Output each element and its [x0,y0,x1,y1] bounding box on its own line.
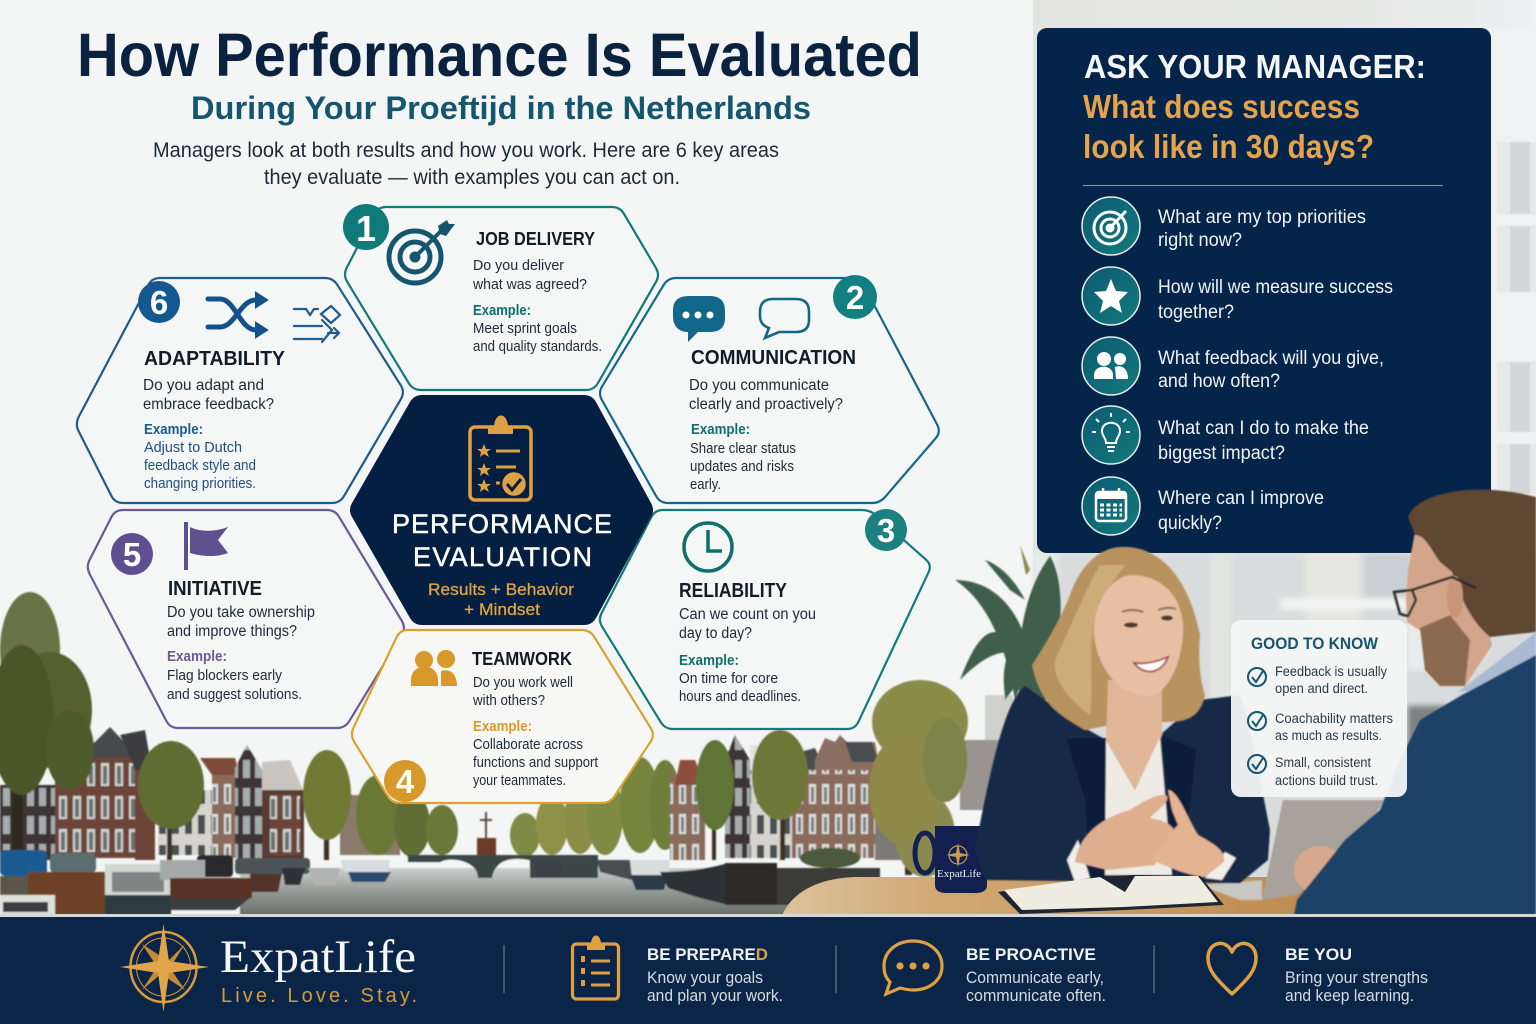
panel subheading [1083,88,1374,165]
icon: target [389,220,455,283]
text: adaptability [143,377,274,492]
text: communication: clearly and proactively? [689,396,843,413]
text: adaptability: Adjust to Dutch [144,440,242,456]
text: teamwork: Example: [473,718,532,735]
text: adaptability: embrace feedback? [143,396,274,413]
footer item: be proactive: Communicate early, [966,969,1104,987]
icon: clock [684,523,732,571]
photo: man seen from behind [1294,490,1536,915]
text: job delivery: Meet sprint goals [473,321,577,337]
text: job delivery: Do you deliver [473,258,564,274]
photo: laptop [1200,800,1385,900]
text: teamwork: Do you work well [473,675,573,691]
bridge [408,855,598,878]
text: adaptability: changing priorities. [144,476,256,492]
icon: change paths [294,306,340,342]
hair [1408,490,1536,637]
panel heading: GOOD TO KNOW [1251,635,1378,653]
number badge 4: 4 [396,763,415,800]
item 2 [1248,711,1393,743]
text: teamwork [472,675,598,789]
question 3: What feedback will you give, [1158,348,1384,369]
footer band [0,914,1536,1024]
cuffs [1067,840,1236,882]
text: reliability: day to day? [679,625,752,642]
center heading: PERFORMANCE [392,509,612,539]
hair highlight [1055,565,1125,715]
text: teamwork: functions and support [473,755,598,771]
icon: clipboard checklist [470,416,531,500]
number badge 5 [111,533,153,575]
center subtext: + Mindset [464,601,540,619]
footer item: be proactive: BE PROACTIVE [966,945,1096,964]
background: plant [955,545,1075,810]
icon: outlined speech bubble [760,299,809,338]
footer item: be proactive [884,941,1106,1005]
hexagon: center performance evaluation [350,395,653,625]
text: initiative: and improve things? [167,623,297,640]
hexagon 3: reliability [600,509,930,729]
number badge 1 [343,204,389,250]
face [1406,532,1492,686]
hexagon 2: communication [600,275,939,503]
number badge 1: 1 [356,208,376,249]
item 1 [1248,664,1387,696]
subtitle: During Your Proeftijd in the Netherlands [191,90,811,126]
intro text: they evaluate — with examples you can act on. [264,166,680,189]
question 2: How will we measure success [1158,277,1393,298]
text: communication: early. [690,477,721,493]
question 1: right now? [1158,230,1242,251]
icon: flag [184,522,228,570]
center subtext [428,581,575,619]
text: communication: Do you communicate [689,377,829,394]
text: initiative: Do you take ownership [167,604,315,621]
face [1094,575,1183,696]
photo: notebook [998,875,1224,914]
number badge 6 [138,281,180,323]
beard [1420,615,1470,686]
question 3 [1082,337,1384,395]
right buildings [670,735,915,860]
hexagon 6: adaptability [77,278,403,503]
panel subheading: What does success [1083,88,1360,125]
panel subheading: look like in 30 days? [1083,128,1374,165]
item 1: open and direct. [1275,681,1368,696]
heading: adaptability: ADAPTABILITY [144,348,286,370]
item 2: as much as results. [1275,728,1382,743]
text: communication: updates and risks [690,459,794,475]
question 1 [1082,197,1366,255]
text: communication [689,377,843,493]
text: reliability: Example: [679,652,739,669]
background: table [782,877,1310,916]
text: teamwork: your teammates. [473,773,566,789]
center subtext: Results + Behavior [428,581,575,599]
left buildings [0,727,400,860]
left trees [0,592,458,860]
text: job delivery [472,258,602,355]
blouse [1105,737,1172,875]
question 4 [1082,406,1369,464]
heading: teamwork: TEAMWORK [472,649,572,669]
left boats [0,860,391,916]
item 2: Coachability matters [1275,711,1393,726]
number badge 3: 3 [877,512,895,549]
neck and chest [1106,680,1162,790]
eyes and smile [1122,608,1176,672]
text: initiative: Example: [167,648,227,665]
number badge 2: 2 [846,279,864,316]
intro text [153,139,779,189]
heading: initiative: INITIATIVE [168,578,262,600]
logo wordmark: ExpatLife [220,931,416,983]
text: adaptability: feedback style and [144,458,256,474]
footer item: be prepared [572,936,783,1005]
text: communication: Share clear status [690,441,796,457]
heading: communication: COMMUNICATION [691,347,856,369]
center heading: EVALUATION [413,542,592,572]
mug with logo [915,826,987,893]
item 3: actions build trust. [1275,773,1378,788]
right boats [535,860,880,905]
panel: good to know [1231,620,1407,797]
question 2: together? [1158,302,1234,323]
background: Amsterdam canal scene [0,592,968,916]
text: job delivery: what was agreed? [472,277,587,293]
text: reliability: Can we count on you [679,606,816,623]
footer item: be you: BE YOU [1285,945,1352,964]
number badge 3 [865,509,907,551]
mug text: ExpatLife [937,868,981,880]
item 1: Feedback is usually [1275,664,1387,679]
glasses [1394,577,1476,616]
cars [0,850,310,877]
question 4: What can I do to make the [1158,418,1369,439]
panel: ask your manager [1037,28,1491,553]
text: initiative: Flag blockers early [167,668,283,684]
footer item: be proactive: communicate often. [966,987,1106,1005]
photo: smiling woman [975,547,1270,883]
hexagon 5: initiative [88,510,404,728]
text: job delivery: Example: [473,302,531,319]
hands [1075,795,1174,870]
icon: filled speech bubble [673,296,725,342]
right distant trees [510,757,681,857]
text: initiative [167,604,315,703]
icon: shuffle arrows [208,293,267,337]
question 2 [1082,267,1393,325]
heading: reliability: RELIABILITY [679,580,788,602]
text: reliability: hours and deadlines. [679,689,801,705]
hexagon 1: job delivery [343,204,658,390]
text: adaptability: Do you adapt and [143,377,264,394]
icon: team [411,650,457,686]
number badge 6: 6 [150,284,168,321]
footer item: be prepared: and plan your work. [647,987,783,1005]
center heading [392,509,612,572]
number badge 4 [384,760,426,802]
text: teamwork: Collaborate across [473,737,583,753]
logo: compass [120,924,209,1012]
panel heading: ASK YOUR MANAGER: [1084,48,1426,85]
question 5: Where can I improve [1158,488,1324,509]
heading: job delivery: JOB DELIVERY [476,229,595,249]
blazer [975,686,1270,883]
ear [1447,576,1463,618]
logo tagline: Live. Love. Stay. [221,985,417,1007]
intro text: Managers look at both results and how you work. Here are 6 key areas [153,139,779,162]
footer item: be you: and keep learning. [1285,987,1414,1005]
question 4: biggest impact? [1158,443,1285,464]
text: communication: Example: [691,421,750,438]
text: reliability [679,606,816,705]
question 3: and how often? [1158,371,1280,392]
collar [1458,632,1536,692]
water [240,868,800,916]
text: initiative: and suggest solutions. [167,687,302,703]
ship [477,812,496,856]
footer item: be prepared: Know your goals [647,969,763,987]
hand [1294,846,1346,894]
question 1: What are my top priorities [1158,207,1366,228]
footer item: be prepared: BE PREPARED [647,945,768,964]
item 3: Small, consistent [1275,755,1371,770]
question 5: quickly? [1158,513,1222,534]
item 3 [1248,755,1378,788]
text: job delivery: and quality standards. [473,339,602,355]
footer item: be you: Bring your strengths [1285,969,1428,987]
text: reliability: On time for core [679,671,778,687]
text: teamwork: with others? [472,693,545,709]
hair back [1032,547,1205,730]
jacket [1294,655,1536,915]
number badge 2 [833,275,877,319]
question 5 [1082,477,1324,535]
text: adaptability: Example: [144,421,203,438]
number badge 5: 5 [123,536,141,573]
right trees [696,680,968,877]
title: How Performance Is Evaluated [77,21,922,89]
background: office window [1033,0,1536,920]
footer item: be you [1208,943,1428,1005]
hexagon 4: teamwork [352,630,653,803]
